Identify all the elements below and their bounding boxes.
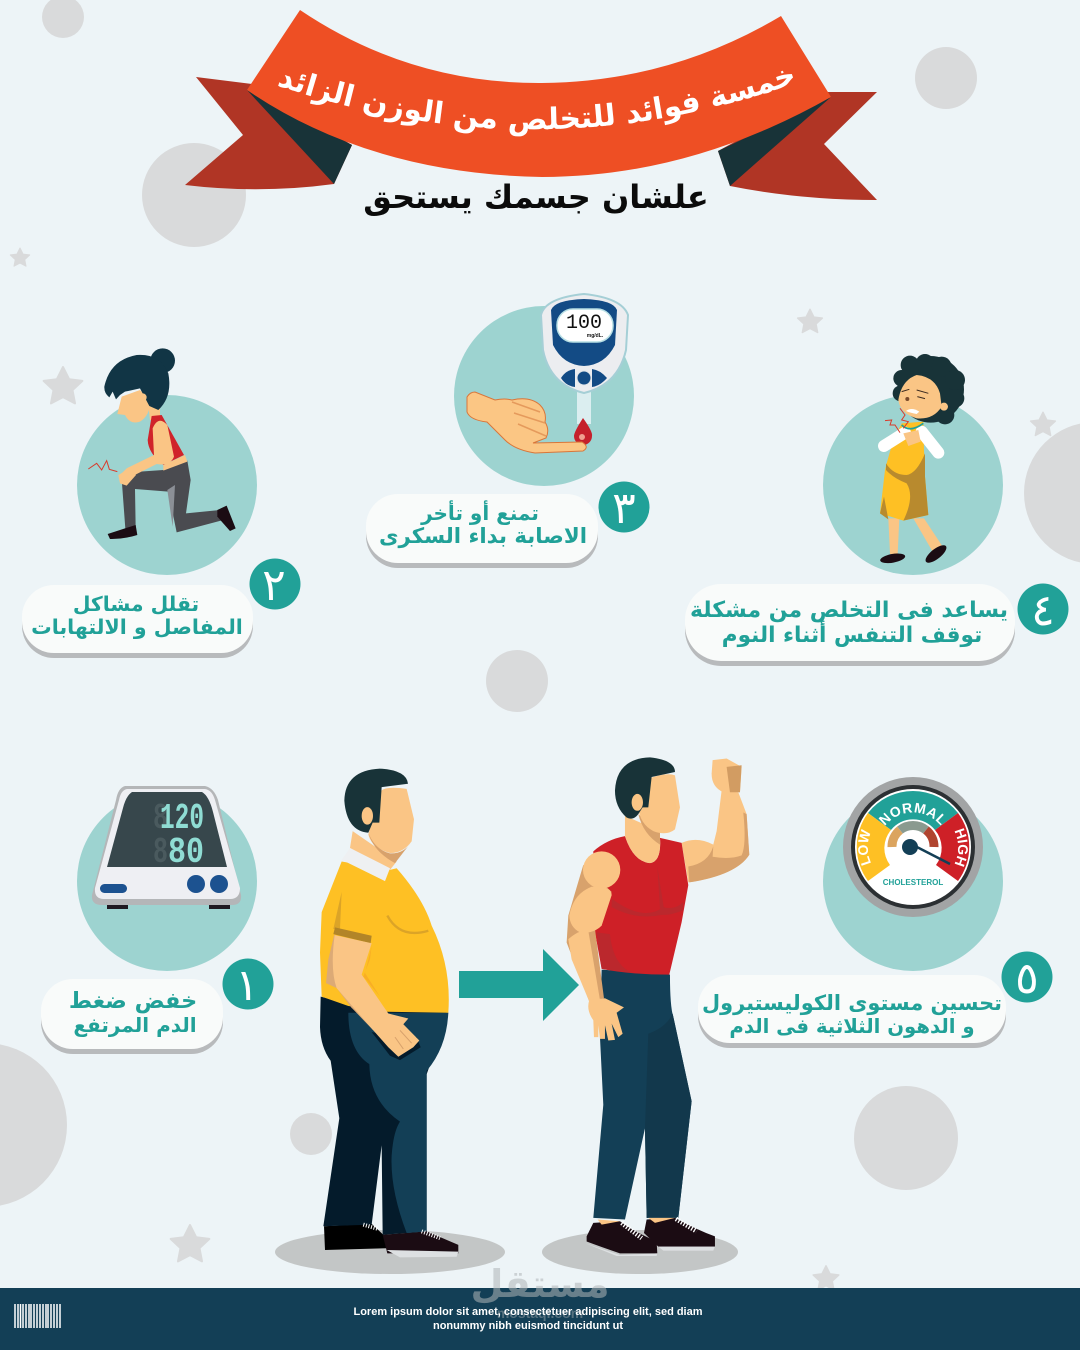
ribbon title text: خمسة فوائد للتخلص من الوزن الزائد [278,70,793,136]
icon: blood pressure monitor: 80 [168,832,204,873]
number badge: ٤ [1031,585,1055,636]
icon: cholesterol gauge: CHOLESTEROL [883,878,943,887]
icon: cholesterol gauge: HIGH [954,828,968,867]
label pill [22,585,253,658]
label pill: الدم المرتفع [73,1013,197,1037]
label pill: توقف التنفس أثناء النوم [722,620,982,648]
label pill [366,494,598,568]
figure: fit man [567,757,749,1256]
icon: blood pressure monitor: 8 [153,798,168,839]
panel: benefit 1 blood pressure [41,786,274,1054]
teal circle [77,791,257,971]
label pill: الاصابة بداء السكرى [379,524,587,549]
panel: benefit 5 cholesterol [698,777,1052,1048]
teal circle [77,395,257,575]
panel: benefit 4 sleep apnea [685,354,1068,666]
number badge: ٣ [612,483,636,534]
icon: blood pressure monitor: 8 [153,832,168,873]
title ribbon [185,10,877,200]
number badge [1002,952,1052,1004]
watermark: mostaql.com [497,1305,583,1321]
panel: benefit 2 joints [22,348,300,658]
icon: blood pressure monitor: 120 [160,798,204,839]
number badge: ٥ [1015,953,1039,1004]
footer text: Lorem ipsum dolor sit amet, consectetuer adipiscing elit, sed diam [353,1306,703,1318]
teal circle [823,791,1003,971]
label pill: تحسين مستوى الكوليستيرول [702,991,1002,1015]
label pill: خفض ضغط [69,988,197,1014]
label pill [41,979,223,1054]
teal circle [454,306,634,486]
footer text [353,1306,703,1332]
ribbon right fold [718,97,831,186]
ribbon left tail [185,77,352,189]
icon: woman choking [879,354,965,566]
icon: glucose meter and hand: mg/dL. [587,333,604,339]
label pill [698,975,1006,1048]
number badge: ٢ [262,560,286,611]
ribbon left fold [247,90,352,184]
label pill: يساعد فى التخلص من مشكلة [690,598,1008,623]
label pill: تقلل مشاكل [73,592,199,616]
figure: overweight man [320,769,458,1257]
icon: cholesterol gauge: NORMAL [878,802,944,826]
watermark: مستقل [471,1262,609,1306]
label pill [685,584,1015,666]
number badge [598,482,650,534]
barcode [15,1304,60,1328]
icon: kneeling woman [88,348,236,539]
icon: glucose meter and hand [467,294,628,453]
icon: blood pressure monitor [92,786,241,909]
teal circle [823,395,1003,575]
label pill: المفاصل و الالتهابات [31,615,243,639]
icon: cholesterol gauge: LOW [858,829,871,866]
floor shadow: overweight man [275,1230,505,1274]
subtitle: علشان جسمك يستحق [363,178,709,216]
arrow [459,949,579,1021]
number badge [222,958,274,1011]
icon: glucose meter and hand: 100 [566,312,602,335]
number badge: ١ [235,960,259,1011]
label pill: تمنع أو تأخر [420,499,539,525]
footer text: nonummy nibh euismod tincidunt ut [433,1320,623,1332]
number badge [250,558,300,611]
label pill: و الدهون الثلاثية فى الدم [729,1015,975,1038]
floor shadow: fit man [542,1230,738,1274]
ribbon band [247,10,831,177]
footer bar [0,1262,1080,1350]
panel: benefit 3 diabetes [366,294,650,568]
number badge [1018,584,1068,636]
icon: cholesterol gauge [843,777,983,917]
ribbon right tail [718,92,877,200]
